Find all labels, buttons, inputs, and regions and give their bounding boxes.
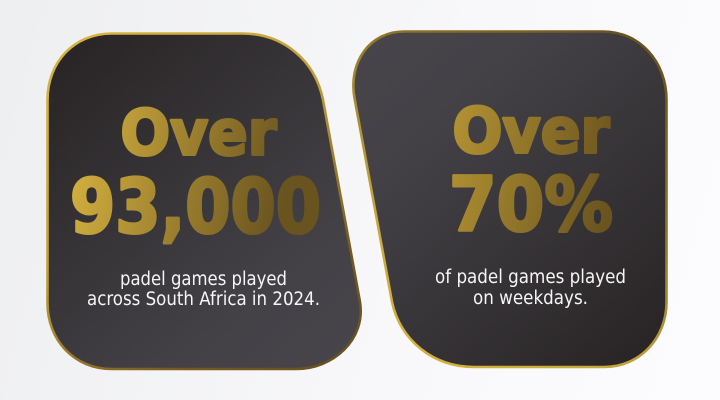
heading: Over: Over [120,96,277,170]
panel: 70% weekdays [353,32,666,367]
panel: 93,000 games [48,34,361,369]
heading: Over: Over [452,94,610,168]
text: description: across South Africa in 2024. [87,289,320,310]
statistic: 93,000: 93,000 [70,162,321,250]
statistic: 70%: 70% [449,160,613,248]
panel shape: right card [353,32,666,367]
text: description: of padel games played [435,267,626,288]
text: description: on weekdays. [473,288,588,309]
panel shape: left card [48,34,361,369]
text: description: padel games played [120,269,287,290]
